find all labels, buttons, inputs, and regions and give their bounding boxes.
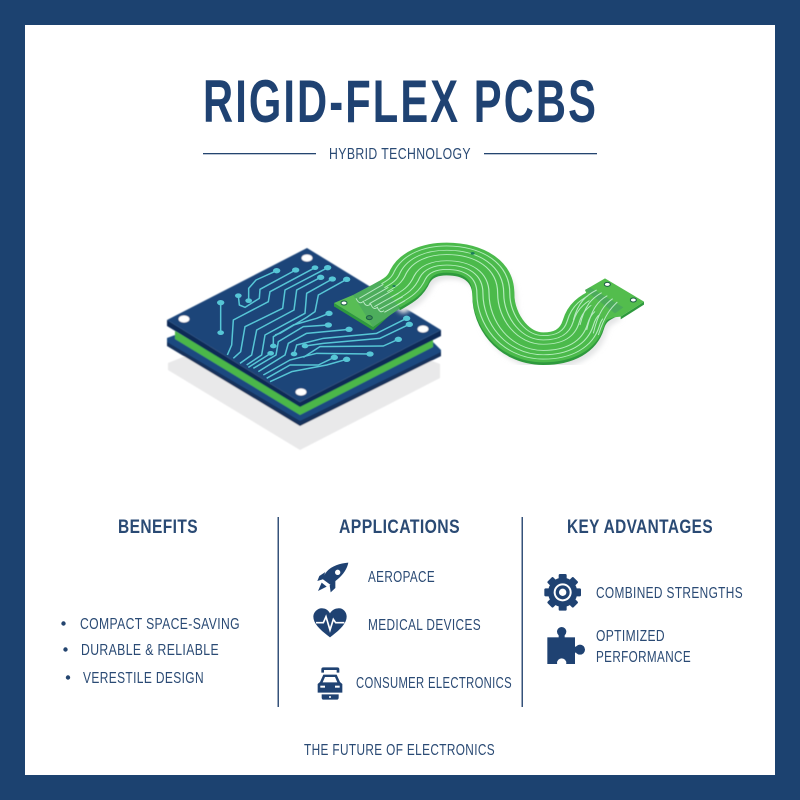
heading: benefits: BENEFITS [118,517,198,538]
label: combined strengths: COMBINED STRENGTHS [596,585,743,602]
panel: applications [313,517,512,700]
flexible circuit ribbon [387,252,610,355]
copper traces [217,265,413,382]
left connector pad [334,281,405,330]
footer tagline: THE FUTURE OF ELECTRONICS [304,742,495,759]
subtitle: HYBRID TECHNOLOGY [329,146,471,163]
column divider left [278,517,279,707]
icon: heart [313,608,347,637]
label: medical devices: MEDICAL DEVICES [368,617,481,634]
column divider right [522,517,523,707]
benefit: compact [61,616,240,633]
panel: benefits [61,517,240,687]
label: optimized performance: OPTIMIZED [596,628,665,645]
label: optimized performance: PERFORMANCE [596,649,691,666]
illustration: rigid-flex circuit board [167,248,644,450]
label: consumer electronics: CONSUMER ELECTRONICS [356,675,512,692]
benefit: durable [63,642,219,659]
icon: gear [544,574,581,611]
icon: rocket [317,563,348,592]
benefit: durable: DURABLE & RELIABLE [81,642,219,659]
benefit: versatile: VERESTILE DESIGN [83,670,204,687]
benefit: versatile [66,670,204,687]
icon: car and phone [318,667,342,700]
right connector pad [573,278,644,335]
heading: key advantages: KEY ADVANTAGES [567,517,713,538]
rigid board stack [167,248,441,450]
title: RIGID-FLEX PCBS [203,68,598,135]
panel: key advantages [544,517,743,668]
icon: puzzle piece [547,627,585,668]
benefit: compact: COMPACT SPACE-SAVING [80,616,240,633]
label: optimized performance [596,628,691,666]
label: aerospace: AEROPACE [368,569,435,586]
heading: applications: APPLICATIONS [339,517,460,538]
